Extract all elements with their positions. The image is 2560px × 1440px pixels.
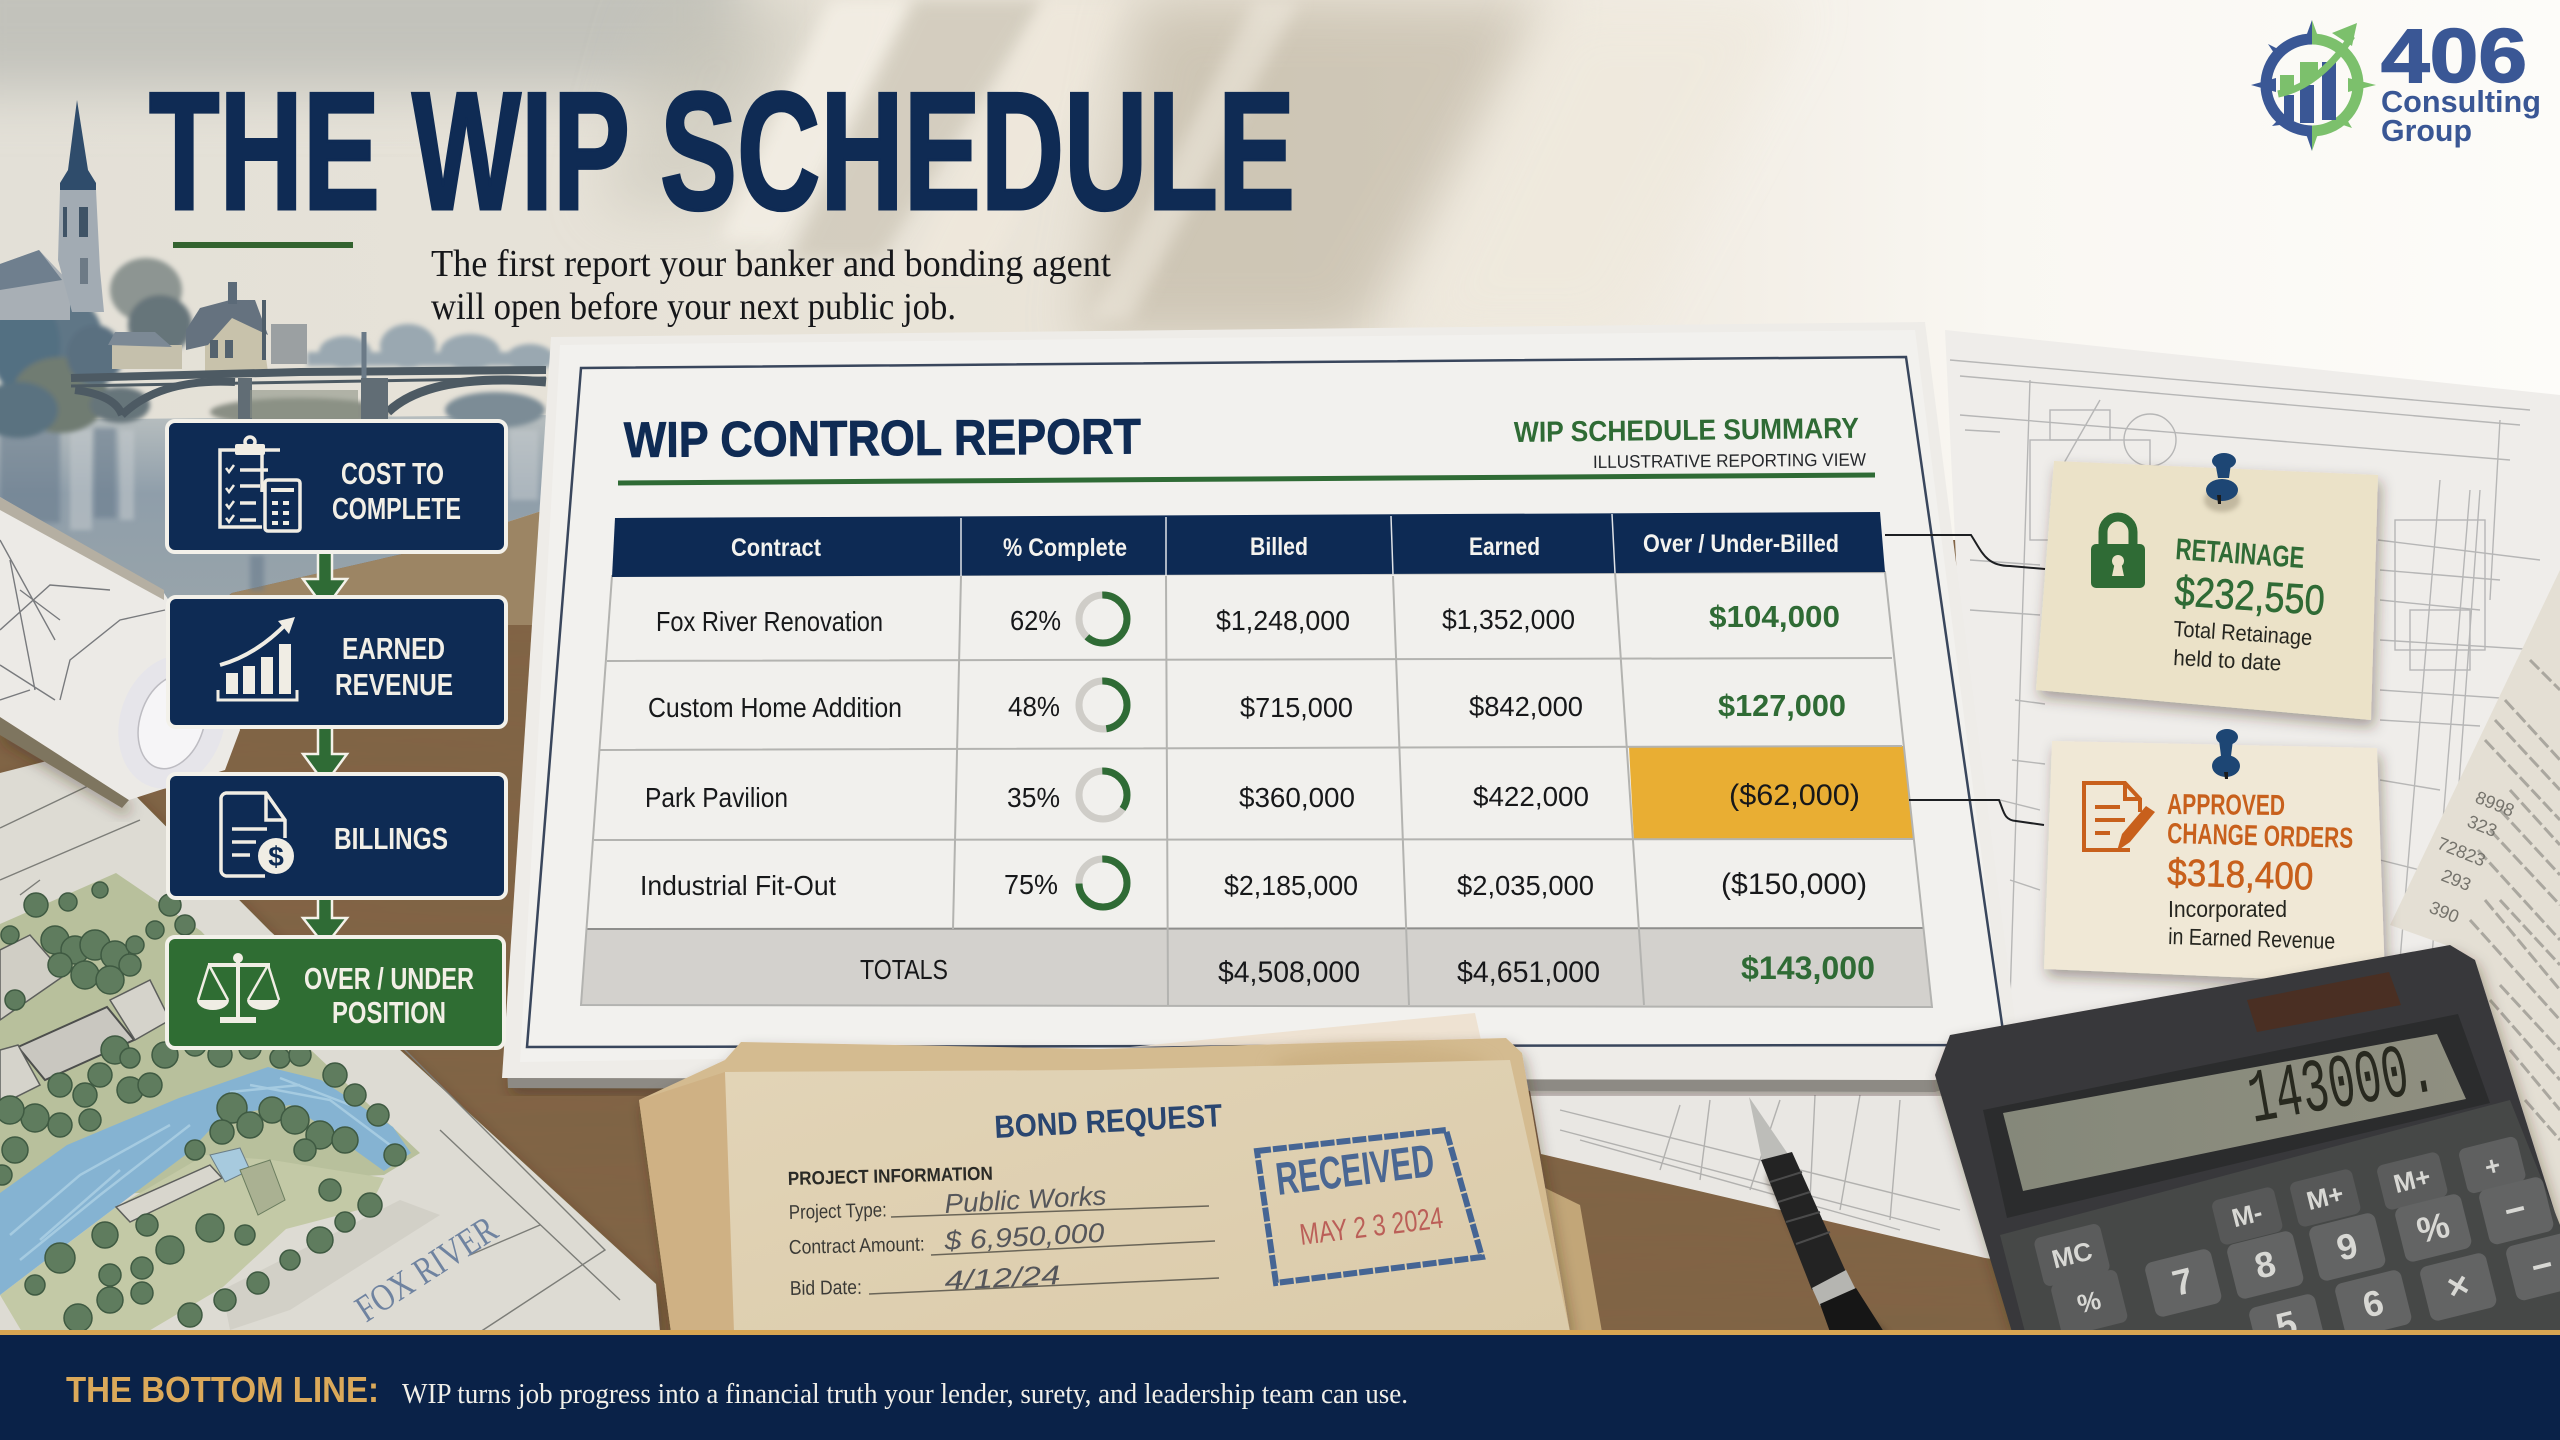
plan upper green band [0,873,420,1200]
note amount: $232,550 [2173,567,2326,624]
icon: balance scale [197,953,279,1023]
form line: project type: Project Type: [789,1199,887,1224]
note caption second line: in Earned Revenue [2168,923,2336,954]
calculator keys [2033,1135,2560,1363]
calculator keys: % [2413,1204,2454,1251]
typed paper figures: 323 [2465,811,2500,841]
calculator keys: + [2481,1150,2503,1182]
calculator keys: − [2527,1243,2557,1288]
logo wordmark second line: Group [2381,113,2472,148]
row: Park Pavilion: ($62,000) [1729,779,1860,812]
step: earned revenue [168,597,506,727]
received stamp: MAY 2 3 2024 [1298,1202,1445,1252]
lower blueprint beneath pen [1529,1085,2030,1260]
row: Fox River Renovation: 62% [1010,605,1061,636]
note caption: Total Retainage [2173,616,2313,650]
blueprint roll [0,497,242,808]
step: over / under position: OVER / UNDER [304,961,474,996]
calculator keys: 6 [2358,1281,2388,1326]
logo: 406 Consulting Group [2251,14,2541,151]
note caption: Incorporated [2168,896,2287,922]
plan lower park [0,1155,384,1332]
row: totals: $143,000 [1741,950,1875,986]
back folder edge [1540,1188,1602,1332]
step: billings [168,774,506,898]
step: over / under position: POSITION [332,995,446,1030]
riverside houses [108,282,307,372]
highlighted cell [1629,746,1913,840]
bridge [71,332,546,422]
received stamp [1257,1130,1482,1283]
received stamp: RECEIVED [1273,1134,1437,1205]
solar panel [2247,972,2401,1032]
table headers [731,530,1839,562]
calculator keys: % [2074,1285,2104,1319]
plan lake [0,1067,411,1295]
form line: contract amount [789,1218,1215,1259]
calculator keys: MC [2049,1236,2095,1274]
row: Industrial Fit-Out: Industrial Fit-Out [640,870,836,901]
row: Custom Home Addition: $715,000 [1240,692,1353,723]
report note: ILLUSTRATIVE REPORTING VIEW [1593,450,1866,472]
background: wooden table [0,540,2560,1340]
report inner border [527,357,2005,1047]
plan trees [0,882,406,1332]
calculator keys: × [2443,1263,2473,1308]
step: over / under position [167,937,504,1048]
row: Custom Home Addition: 48% [1008,691,1060,722]
row: Industrial Fit-Out: $2,185,000 [1224,870,1358,901]
row: Park Pavilion: 35% [1007,782,1060,813]
row: Industrial Fit-Out [640,859,1867,907]
typed paper figures: 8998 [2473,787,2517,821]
icon: document and pencil [2084,783,2155,851]
table headers: Contract [731,534,822,562]
calculator keys: 8 [2250,1242,2280,1287]
row: Park Pavilion: $422,000 [1473,781,1589,812]
calculator keys: M+ [2390,1161,2434,1199]
totals row [581,928,1932,1007]
table headers: % Complete [1003,534,1127,562]
row: Industrial Fit-Out: 75% [1004,869,1058,900]
WIP table [581,512,1932,1007]
form line: project type: Public Works [944,1181,1107,1219]
row: Custom Home Addition: $127,000 [1718,688,1846,723]
step: earned revenue: EARNED [342,631,445,666]
typed paper figures: 293 [2439,865,2474,895]
banner message: WIP turns job progress into a financial truth your lender, surety, and leadership team can use. [402,1379,1408,1410]
LCD screen [2003,1034,2466,1191]
row: Custom Home Addition: $842,000 [1469,691,1583,722]
scene: river with church and bridge [0,100,560,640]
step: cost to complete: COMPLETE [332,491,461,526]
arrow [303,552,347,609]
calculator keys: M- [2229,1197,2265,1233]
row: Custom Home Addition [648,681,1846,729]
row: Fox River Renovation: Fox River Renovation [656,606,883,637]
row: Industrial Fit-Out: ($150,000) [1721,868,1867,901]
logo number: 406 [2381,14,2527,99]
note: retainage [2036,453,2378,720]
far tree line [307,324,554,372]
form line: project type [789,1181,1209,1224]
plan buildings by the lake [116,1165,222,1222]
table body [587,572,1923,929]
typed paper figures: 72823 [2435,833,2488,870]
form section label: PROJECT INFORMATION [788,1164,993,1190]
plan river label: FOX RIVER [348,1208,506,1331]
row: Custom Home Addition: Custom Home Addition [648,692,902,723]
calculator keys: 5 [2272,1302,2301,1347]
plan building blocks [0,935,170,1105]
row: Fox River Renovation: $1,248,000 [1216,605,1350,636]
site plan: Fox River [0,750,660,1332]
form line: bid date [790,1260,1219,1300]
blueprint sheet behind notes [1945,330,2560,1060]
form line: bid date: 4/12/24 [944,1260,1061,1296]
step: earned revenue: REVENUE [335,667,453,702]
arrow [303,727,347,784]
step: cost to complete [167,421,506,552]
icon: rising bars [218,617,297,700]
stained flap [1270,1046,1490,1090]
step: cost to complete: COST TO [341,456,444,491]
typed paper figures [2427,787,2517,927]
icon: invoice with dollar [221,793,294,876]
table headers: Earned [1469,533,1540,561]
row: Fox River Renovation: $104,000 [1709,599,1840,634]
note amount: $318,400 [2167,852,2314,899]
subtitle [431,243,1111,328]
title: THE WIP SCHEDULE [149,57,1295,245]
row: Park Pavilion [645,771,1860,819]
pen [1749,1097,1890,1332]
flow chain: job cost to position [167,421,506,1048]
row: Fox River Renovation: $1,352,000 [1442,604,1575,635]
bond request heading: BOND REQUEST [993,1097,1223,1145]
note heading second line: CHANGE ORDERS [2167,818,2354,855]
note: approved change orders [2044,729,2385,980]
note heading: APPROVED [2167,789,2285,822]
calculator keys: M+ [2303,1178,2347,1216]
row: totals: $4,508,000 [1218,956,1360,989]
calculator keys: 9 [2332,1224,2362,1269]
icon: invoice with dollar: $ [268,841,284,872]
table header band [612,512,1885,577]
report title: WIP CONTROL REPORT [624,408,1141,468]
connector lines from table to notes [1885,535,2045,825]
step: billings: BILLINGS [334,821,448,856]
row: Park Pavilion: Park Pavilion [645,782,788,813]
icon: push pin [2204,453,2240,512]
table headers: Over / Under-Billed [1643,530,1839,558]
logo wordmark: Consulting [2381,84,2541,119]
display bezel [1983,1014,2490,1218]
subtitle: The first report your banker and bonding agent [431,243,1111,285]
arrow [303,897,347,946]
riverside trees [0,258,545,438]
row: Industrial Fit-Out: $2,035,000 [1457,870,1594,901]
bottom line banner [0,1330,2560,1440]
row: totals [860,950,1875,989]
icon: clipboard and calculator [220,437,300,531]
row: totals: $4,651,000 [1457,956,1600,989]
icon: push pin [2212,729,2240,779]
calculator keys: − [2500,1187,2530,1232]
note caption second line: held to date [2173,645,2282,676]
row: totals: TOTALS [860,954,948,985]
table headers: Billed [1250,533,1308,561]
icon: padlock [2091,517,2145,588]
row: Fox River Renovation [656,595,1840,643]
row: Park Pavilion: $360,000 [1239,782,1355,813]
river water [0,415,560,640]
calculator [1935,945,2560,1363]
note heading: RETAINAGE [2175,533,2305,575]
church [0,100,104,320]
form line: contract amount: $ 6,950,000 [943,1218,1105,1256]
form line: bid date: Bid Date: [790,1277,862,1300]
bond request folder [639,1013,1602,1332]
report subtitle: WIP SCHEDULE SUMMARY [1514,413,1859,449]
form line: contract amount: Contract Amount: [789,1233,925,1259]
typed paper at right edge [2390,570,2560,1240]
main report paper [502,322,2015,1092]
calculator keys: 7 [2168,1259,2198,1304]
banner label: THE BOTTOM LINE: [66,1369,379,1410]
subtitle: will open before your next public job. [431,286,956,328]
typed paper figures: 390 [2427,897,2462,927]
logo compass mark [2251,20,2376,151]
